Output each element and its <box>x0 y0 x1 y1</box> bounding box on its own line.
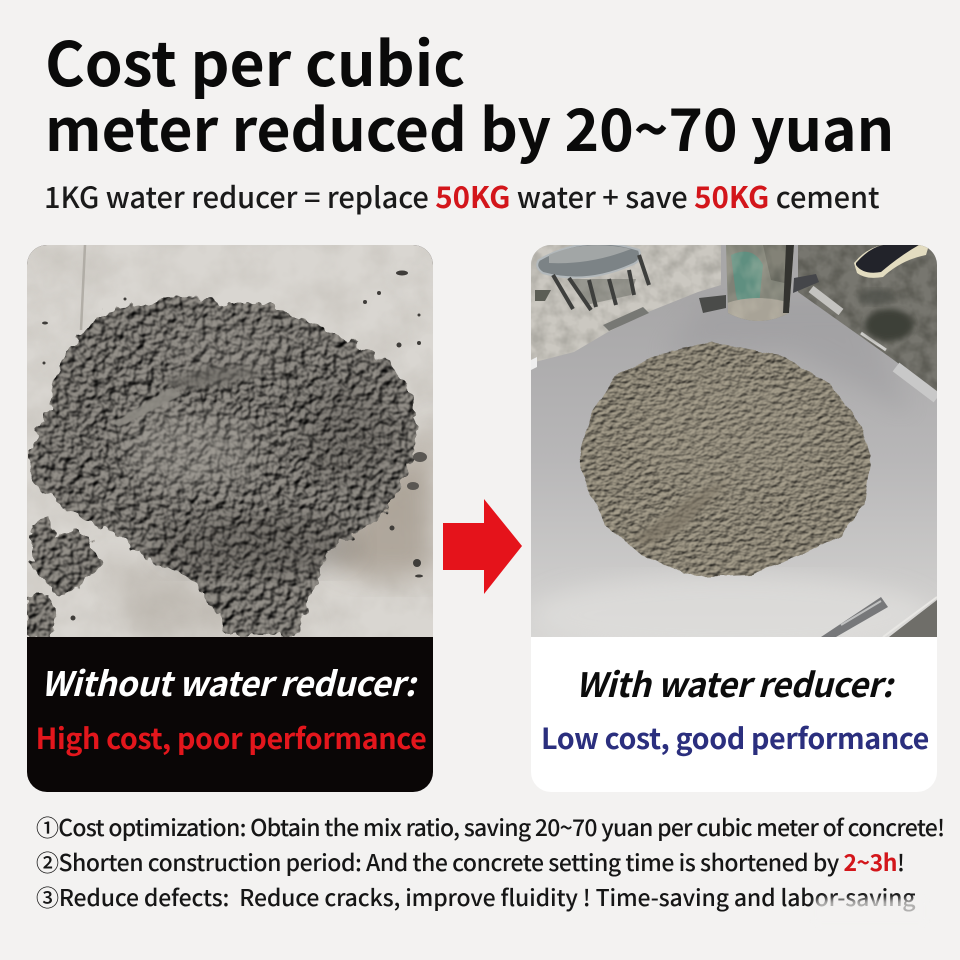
scattered stones <box>42 270 427 620</box>
panel: with water reducer <box>531 245 937 792</box>
shoe <box>854 245 929 278</box>
caption: with water reducer: With water reducer: <box>576 658 892 707</box>
panel: without water reducer <box>27 245 433 792</box>
caption: without water reducer: Without water reducer: <box>41 657 415 706</box>
smudge over last line <box>815 899 925 923</box>
title: Cost per cubic <box>45 17 465 104</box>
cone <box>699 245 819 321</box>
scraper tool <box>821 597 937 637</box>
title <box>45 17 894 168</box>
arrow <box>443 499 522 594</box>
ground: left light, right dark <box>531 245 721 363</box>
benefit 3: ③Reduce defects: Reduce cracks, improve fluidity ! Time-saving and labor-saving <box>36 879 915 913</box>
benefits list <box>36 809 944 913</box>
machinery <box>535 243 649 331</box>
benefit 1: ①Cost optimization: Obtain the mix ratio, saving 20~70 yuan per cubic meter of concrete! <box>36 809 944 843</box>
wet patch <box>865 309 913 341</box>
photo: dry crumbling concrete <box>27 245 433 637</box>
slump flow of concrete <box>579 342 871 577</box>
caption: high cost: High cost, poor performance <box>36 717 426 758</box>
title: meter reduced by 20~70 yuan <box>45 83 894 168</box>
benefit 2: ②Shorten construction period: And the concrete setting time is shortened by 2~3h! <box>36 844 904 878</box>
photo: flowing concrete on plate <box>531 245 937 637</box>
plate <box>531 245 937 637</box>
subtitle: 1KG water reducer = replace 50KG water + save 50KG cement <box>44 175 879 217</box>
caption: low cost: Low cost, good performance <box>541 717 929 758</box>
small clumps <box>27 517 101 637</box>
pile of aggregate <box>29 295 417 635</box>
